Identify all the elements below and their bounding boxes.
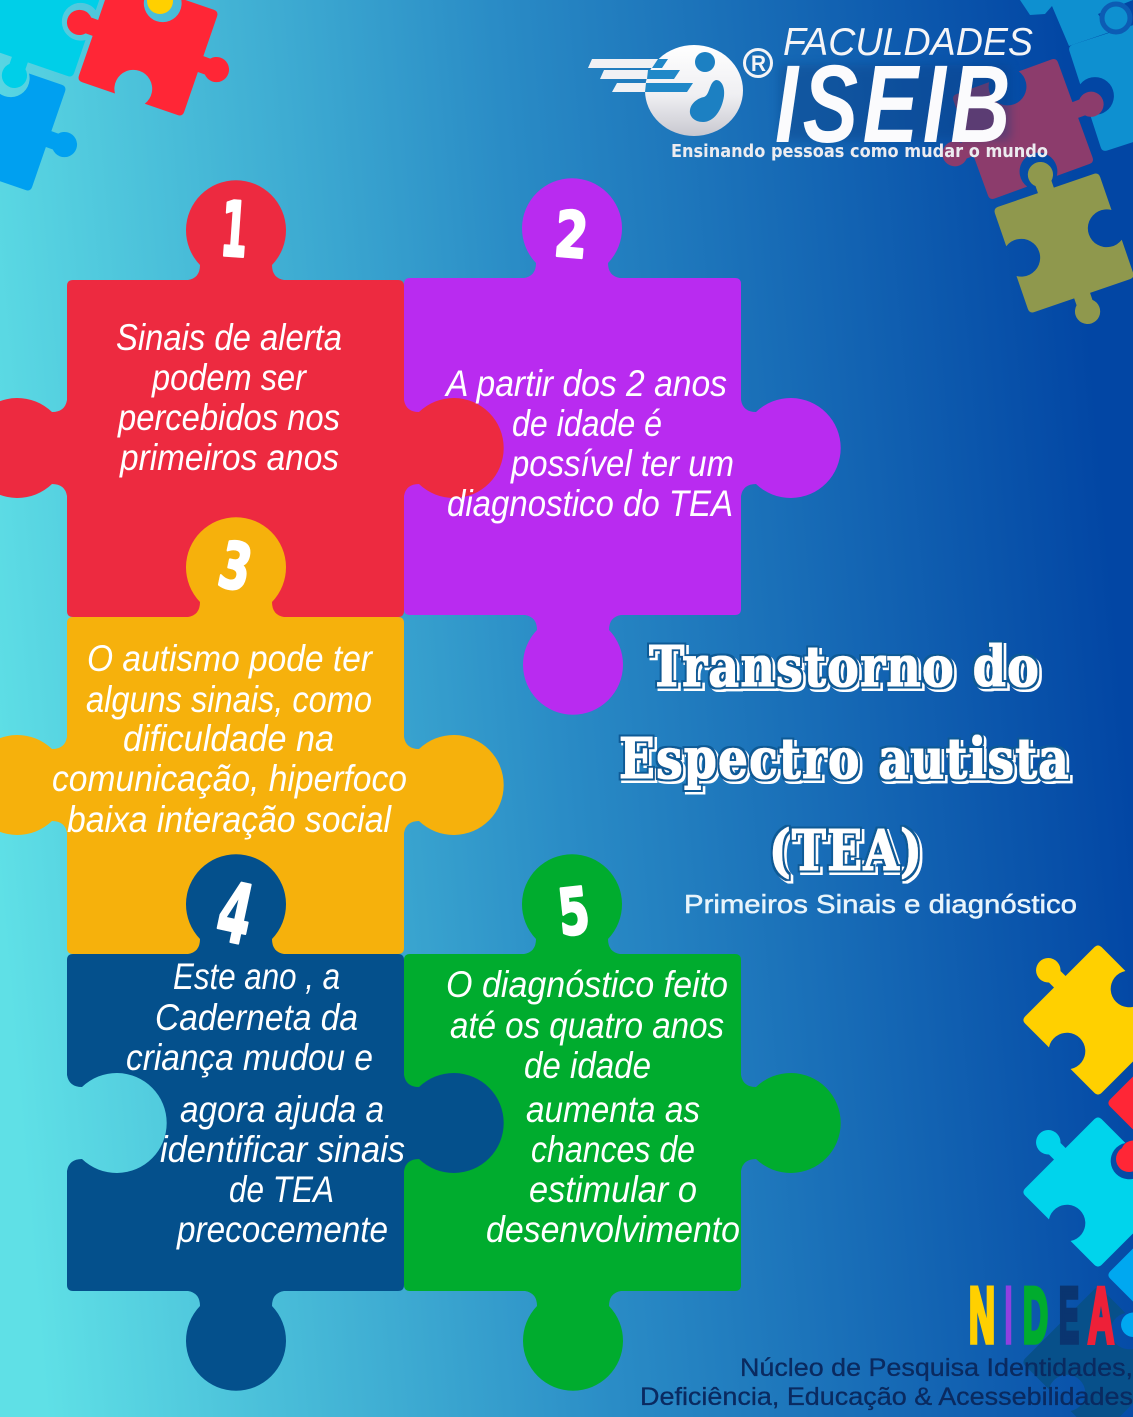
text: piece 5: de idade [524,1045,651,1086]
number 3: 3 [212,528,258,607]
NIDEA wordmark: E [1059,1271,1079,1359]
text: piece 5 [446,964,740,1250]
decorative puzzle pieces: top right [924,0,1133,341]
logo tagline: Ensinando pessoas como mudar o mundo [671,141,1048,162]
number 1: 1 [218,184,251,275]
puzzle piece 3: yellow [0,517,504,954]
puzzle piece 4: navy [67,854,504,1391]
text: piece 5: O diagnóstico feito [446,964,728,1005]
decorative puzzle pieces: top left [0,0,246,201]
puzzle piece 5: green [404,854,841,1391]
text: piece 4: de TEA [229,1169,334,1210]
NIDEA wordmark [969,1271,1114,1359]
logo shadow [780,65,1010,140]
text: piece 2 [444,363,734,524]
NIDEA wordmark: N [969,1271,995,1359]
registered mark [744,50,772,76]
text: piece 1: primeiros anos [119,437,339,478]
number 4: 4 [209,865,261,964]
text: piece 3: comunicação, hiperfoco [52,758,407,799]
text: piece 1 [116,317,342,478]
text: piece 5: desenvolvimento [486,1209,740,1250]
text: piece 4: identificar sinais [160,1129,405,1170]
title: Transtorno do [649,634,1040,700]
text: piece 4: Caderneta da [155,997,358,1038]
text: piece 2: diagnostico do TEA [447,483,733,524]
text: piece 5: aumenta as [526,1089,700,1130]
text: piece 1: Sinais de alerta [116,317,342,358]
text: piece 3: baixa interação social [67,799,393,840]
NIDEA wordmark: I [1005,1271,1012,1359]
title [619,634,1070,884]
puzzle piece 1: red [0,180,504,617]
title: (TEA) [769,818,923,884]
NIDEA wordmark: D [1023,1271,1048,1359]
text: piece 1: percebidos nos [117,397,340,438]
logo: Faculdades ISEIB [588,21,1048,166]
text: piece 4 [126,956,405,1250]
text: piece 1: podem ser [151,357,307,398]
text: piece 5: estimular o [529,1169,697,1210]
NIDEA full name: Núcleo de Pesquisa Identidades, [740,1354,1133,1382]
number 2: 2 [552,198,591,273]
text: piece 4: precocemente [176,1209,388,1250]
logo icon: ball with runner [588,45,743,136]
registered mark: R [751,51,766,76]
text: piece 4: Este ano , a [173,956,340,997]
NIDEA full name [640,1354,1133,1411]
text: piece 2: possível ter um [510,443,734,484]
text: piece 2: de idade é [512,403,662,444]
text: piece 3 [52,638,407,840]
number 5: 5 [555,875,593,951]
text: piece 3: dificuldade na [123,718,334,759]
logo word ISEIB: ISEIB [775,43,1015,166]
NIDEA full name: Deficiência, Educação & Acessebilidades [640,1383,1133,1411]
puzzle piece 2: purple [404,178,841,715]
text: piece 5: chances de [531,1129,695,1170]
text: piece 3: alguns sinais, como [86,679,372,720]
text: piece 3: O autismo pode ter [87,638,374,679]
text: piece 4: agora ajuda a [180,1089,384,1130]
decorative puzzle pieces: bottom right [1001,923,1133,1417]
logo word Faculdades: FACULDADES [783,21,1033,64]
text: piece 5: até os quatro anos [450,1005,724,1046]
text: piece 4: criança mudou e [126,1037,373,1078]
text: piece 2: A partir dos 2 anos [444,363,727,404]
subtitle: Primeiros Sinais e diagnóstico [684,889,1077,919]
